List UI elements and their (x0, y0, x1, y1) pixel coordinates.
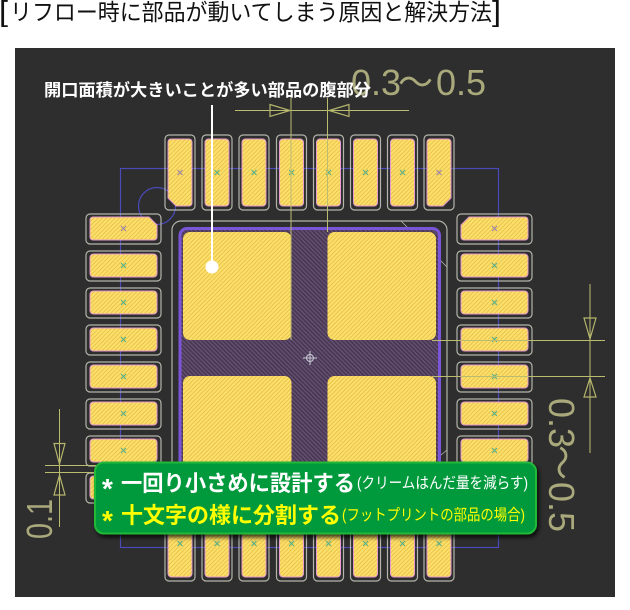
dimension: right gap 0.3 to 0.5: 0.5 (541, 482, 582, 532)
paste opening: top right (328, 232, 436, 340)
dimension: top gap 0.3 to 0.5: ～ (398, 64, 433, 103)
component silkscreen outline (120, 168, 498, 548)
solution line 2 (102, 503, 525, 536)
callout: design solutions (95, 462, 536, 536)
dimension: top gap 0.3 to 0.5 (235, 62, 486, 340)
left pads (86, 214, 161, 503)
bottom pads (165, 506, 454, 581)
dimension: right gap 0.3 to 0.5: ～ (541, 445, 580, 480)
center crosshair mark (303, 351, 317, 365)
solution line 1 (102, 471, 528, 504)
callout: exposed pad label with leader (44, 80, 371, 274)
right pads (457, 214, 532, 503)
courtyard outline (172, 221, 447, 496)
top pads (165, 135, 454, 210)
leader line and dot (206, 105, 218, 274)
solution line 2: * (102, 505, 113, 536)
solution line 2: 十文字の様に分割する (121, 503, 341, 528)
dimension: right gap 0.3 to 0.5 (432, 284, 605, 532)
paste opening: bottom right (328, 376, 436, 484)
dimension: right gap 0.3 to 0.5: 0.3 (541, 398, 582, 448)
solution line 1: (クリームはんだ量を減らす) (357, 474, 528, 492)
solution line 2: (フットプリントの部品の場合) (342, 506, 525, 524)
dimension: left 0.1: 0.1 (19, 499, 60, 539)
solution line 1: * (102, 473, 113, 504)
solution line 1: 一回り小さめに設計する (121, 471, 355, 496)
paste opening: bottom left (183, 376, 292, 484)
callout: exposed pad label with leader: 開口面積が大きいことが多い部品の腹部分 (44, 80, 371, 100)
dimension: top gap 0.3 to 0.5: 0.5 (436, 62, 486, 103)
thermal pad with cross-shaped paste openings (180, 228, 440, 488)
dimension: top gap 0.3 to 0.5: 0.3 (351, 62, 401, 103)
dimension: left 0.1 (19, 409, 96, 539)
paste opening: top left (183, 232, 292, 340)
